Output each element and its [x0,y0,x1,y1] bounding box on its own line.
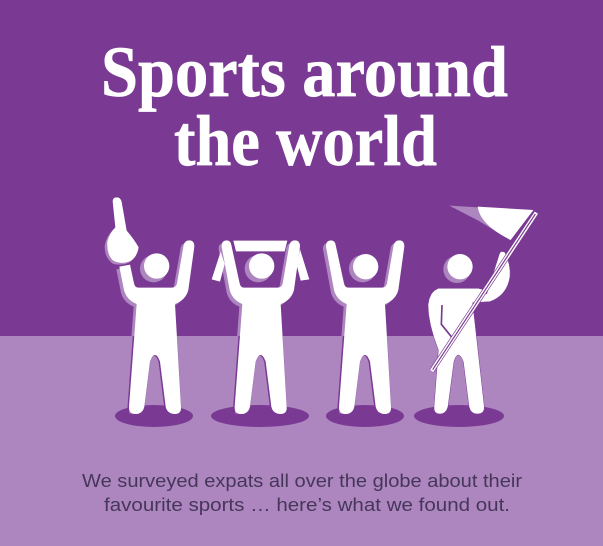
background: upper purple panel [0,0,603,336]
foam finger [107,197,139,263]
intro text [82,470,522,515]
figure: fan with raised arms [323,240,404,417]
figure: fan holding shirt [212,240,309,417]
intro text: We surveyed expats all over the globe about their [82,470,522,491]
title: the world [174,101,437,181]
arm crease [441,305,453,338]
body [428,251,510,414]
figure: fan with flag [428,206,536,414]
flag [449,206,533,240]
background: lower lilac floor [0,336,603,546]
floor shadows under figures [115,405,504,427]
title: Sports around [101,32,508,112]
intro text: favourite sports … here’s what we found out. [104,494,510,515]
title [101,32,508,181]
flag pole [432,213,536,371]
figure: fan with foam finger [105,197,194,417]
shirt [212,241,309,282]
